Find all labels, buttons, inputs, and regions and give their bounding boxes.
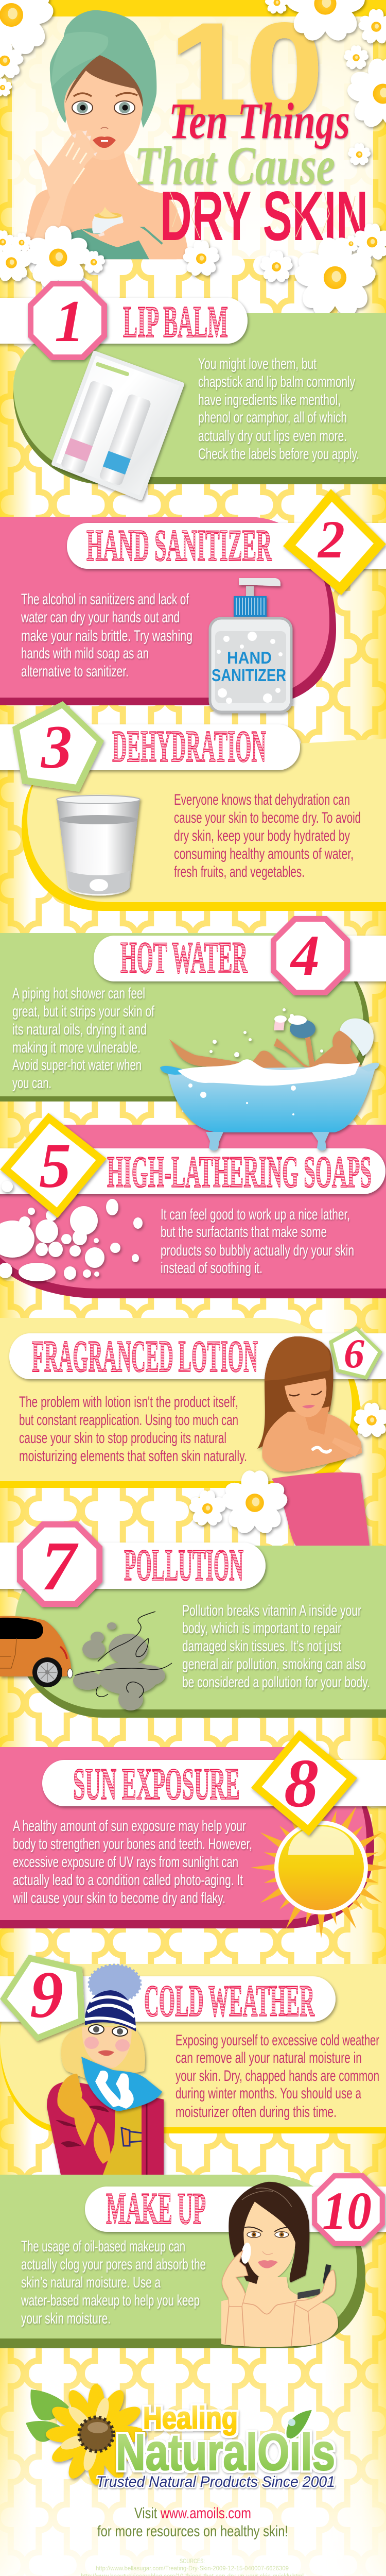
badge: number 6	[329, 1326, 382, 1380]
panel: 9 cold weather	[0, 1955, 386, 2175]
illustration: sanitizer bottle: SANITIZER	[212, 666, 286, 685]
bather	[169, 1028, 363, 1071]
cream streaks	[66, 143, 86, 184]
body text	[182, 1602, 370, 1691]
panel: 3 dehydration	[0, 701, 386, 911]
call to action	[97, 2505, 288, 2540]
body text	[12, 1818, 252, 1907]
header cream panel	[12, 16, 373, 259]
car window	[0, 1618, 43, 1639]
towel dress	[63, 227, 163, 259]
body text: moisturizing elements that soften skin naturally.	[19, 1448, 247, 1465]
body text: you can.	[12, 1075, 51, 1092]
panel background	[0, 517, 336, 705]
top yellow band	[0, 0, 386, 16]
soap sponge	[290, 1020, 315, 1038]
compact	[323, 2264, 331, 2291]
wordmark: Natural Oils: NaturalOils	[116, 2424, 335, 2481]
badge: number 3	[12, 701, 104, 792]
face	[82, 2025, 132, 2068]
body text	[12, 985, 154, 1092]
illustration: sun	[251, 1797, 386, 1938]
illustration: woman with compact	[221, 2182, 338, 2347]
panel background	[0, 933, 370, 1101]
body text: fresh fruits, and vegetables.	[174, 863, 305, 880]
body text: water can dry your hands out and	[21, 609, 180, 626]
body text: cause your skin to stop producing its natural	[19, 1430, 226, 1447]
tagline: Trusted Natural Products Since 2001	[96, 2473, 335, 2490]
panel: 10 make up: MAKE UP	[106, 2184, 206, 2234]
shoulders and neck	[221, 2277, 338, 2347]
body text	[198, 355, 359, 463]
exhaust pipe	[67, 1669, 73, 1678]
illustration: glass of water	[57, 794, 140, 895]
smoke swirls	[75, 1612, 172, 1698]
car body	[0, 1616, 72, 1676]
body text: body to strengthen your bones and teeth. However,	[13, 1836, 252, 1853]
ribbon	[42, 1760, 386, 1806]
shower cap	[340, 1019, 374, 1056]
hair	[65, 55, 143, 107]
body text: make your nails brittle. Try washing	[21, 628, 192, 645]
ribbon	[0, 1976, 336, 2022]
illustration: lip balm card	[54, 353, 182, 498]
body text: The alcohol in sanitizers and lack of	[21, 591, 189, 608]
title: That Cause: That Cause	[134, 135, 335, 196]
panel: 4 hot water	[0, 916, 386, 1150]
face	[285, 1378, 326, 1417]
panel background	[0, 1125, 386, 1298]
badge: number 5: 5	[39, 1130, 71, 1201]
raised hand	[32, 130, 96, 244]
body text	[21, 591, 192, 680]
hair	[229, 2182, 309, 2284]
badge: number 1: 1	[55, 289, 84, 354]
decorative daisies around header	[0, 0, 386, 320]
ribbon	[94, 936, 386, 981]
illustration: girl in winter clothes	[47, 1965, 164, 2175]
body text: its natural oils, drying it and	[12, 1021, 147, 1038]
panel background	[0, 1318, 360, 1488]
bathtub	[167, 1066, 376, 1132]
body text: instead of soothing it.	[161, 1260, 262, 1277]
wheel	[32, 1657, 62, 1687]
shoulder and arm	[262, 1412, 362, 1472]
panel: 6 fragranced lotion	[0, 1318, 386, 1546]
ribbon	[0, 298, 248, 344]
body text: great, but it strips your skin of	[12, 1003, 154, 1020]
body text: The problem with lotion isn't the product itself,	[19, 1394, 238, 1411]
sources	[13, 2558, 371, 2576]
sources: SOURCES:	[180, 2558, 205, 2565]
panel background	[0, 1964, 386, 2133]
panel: 8 sun exposure	[0, 1730, 386, 1938]
body text: A healthy amount of sun exposure may help your	[13, 1818, 246, 1835]
badge: number 8	[251, 1730, 357, 1836]
shoulders and chest	[24, 149, 189, 259]
badge: number 7	[17, 1521, 102, 1607]
panel background	[13, 313, 386, 484]
panel: 7 pollution	[0, 1521, 386, 1718]
lotion squiggle	[313, 1447, 330, 1452]
ribbon	[67, 523, 386, 569]
closed eyes and lips	[289, 1391, 322, 1396]
back hair	[61, 2026, 145, 2081]
nose and lips	[101, 127, 108, 129]
scarf	[81, 2057, 162, 2111]
body text	[161, 1206, 354, 1277]
badge: number 10	[312, 2173, 385, 2246]
sunflower	[26, 2384, 147, 2485]
body text: making it more vulnerable.	[12, 1039, 141, 1056]
body text: hands with mild soap as an	[21, 645, 149, 662]
badge: number 2	[283, 489, 386, 595]
panel: 4 hot water: HOT WATER	[120, 933, 248, 983]
body text: alternative to sanitizer.	[21, 663, 129, 680]
body text: your skin moisture.	[21, 2310, 111, 2327]
face	[64, 64, 143, 160]
collar bone lines	[225, 2301, 311, 2346]
finger nails	[72, 130, 97, 156]
badge: number 5	[0, 1113, 107, 1218]
leaf with droplet	[286, 2409, 313, 2439]
body text: A piping hot shower can feel	[12, 985, 145, 1002]
right hand	[295, 2270, 336, 2312]
illustration: sanitizer bottle: HAND	[227, 648, 272, 667]
body text: You might love them, but	[198, 355, 317, 372]
illustration: soap bubbles	[0, 1181, 143, 1281]
body text: skin’s natural moisture. Use a	[21, 2274, 161, 2291]
sun rays	[251, 1797, 386, 1938]
ribbon	[0, 1543, 266, 1589]
badge: number 9	[0, 1955, 85, 2041]
car door line	[0, 1638, 16, 1668]
jar	[92, 216, 124, 233]
eyes and brows	[244, 2227, 289, 2238]
daisies	[188, 1403, 386, 1537]
body text: but constant reapplication. Using too much can	[19, 1412, 238, 1429]
badge: number 10: 10	[322, 2181, 372, 2241]
panel background	[0, 1747, 374, 1928]
panel background	[0, 2175, 365, 2348]
wordmark: Healing: Healing	[143, 2401, 238, 2435]
braid	[57, 2074, 111, 2164]
visit line: Visit www.amoils.com	[134, 2505, 251, 2522]
panel background	[15, 1546, 386, 1718]
panel background	[22, 738, 386, 911]
panel: 5 high-lathering soaps	[0, 1113, 386, 1298]
illustration: woman applying lotion	[257, 1336, 370, 1546]
ribbon	[85, 2187, 386, 2232]
sun disc	[274, 1821, 368, 1914]
illustration: car exhaust	[0, 1612, 172, 1710]
header section	[0, 0, 386, 320]
panel: 1 lip balm: LIP BALM	[123, 297, 228, 347]
body text	[19, 1394, 247, 1465]
body text: The usage of oil-based makeup can	[21, 2238, 185, 2255]
cotton pad	[240, 2242, 252, 2264]
sources: http://www.bellasugar.com/Treating-Dry-Skin-2009-12-15-040007-6626309	[96, 2566, 289, 2572]
tub feet	[206, 1132, 223, 1150]
foam	[178, 1059, 360, 1086]
badge: number 7: 7	[41, 1528, 79, 1605]
badge: number 2: 2	[317, 510, 345, 569]
badge: number 4	[271, 916, 350, 995]
badge: number 1	[28, 281, 107, 360]
smoke	[73, 1622, 165, 1710]
turban	[50, 10, 156, 128]
body text: Avoid super-hot water when	[12, 1057, 142, 1074]
towel	[272, 1472, 370, 1546]
coat inner	[103, 2094, 142, 2175]
panel: 10 make up	[0, 2173, 386, 2348]
seed head	[79, 2417, 113, 2451]
badge: number 8: 8	[284, 1745, 319, 1821]
body text: actually clog your pores and absorb the	[21, 2256, 206, 2273]
body text: water-based makeup to help you keep	[21, 2292, 200, 2309]
petals	[46, 2384, 147, 2485]
hair back	[257, 1336, 334, 1449]
illustration: woman in bubble bath	[160, 1008, 379, 1150]
left hand	[222, 2250, 248, 2307]
logo: Healing Natural Oils	[26, 2384, 335, 2490]
nose and lips	[262, 2251, 273, 2255]
badge: number 6: 6	[344, 1331, 364, 1377]
body text	[176, 2032, 379, 2121]
badge: number 9: 9	[30, 1958, 63, 2032]
ribbon	[9, 1333, 386, 1379]
leaves	[30, 2389, 69, 2420]
eyes	[72, 93, 137, 114]
illustration: sanitizer bottle	[210, 578, 291, 712]
badge: number 4: 4	[290, 924, 320, 988]
face	[243, 2201, 295, 2279]
body text	[21, 2238, 206, 2327]
title: 10: 10	[170, 0, 323, 142]
ribbon	[0, 1148, 385, 1194]
holding hand	[81, 223, 177, 259]
car tail light	[60, 1647, 67, 1659]
panel: 2 hand sanitizer	[0, 489, 386, 712]
body text	[174, 791, 361, 880]
panel: 1 lip balm	[0, 281, 386, 498]
fringe hair	[265, 1336, 330, 1381]
badge: number 3: 3	[41, 713, 72, 781]
body text: actually lead to a condition called photo-aging. It	[13, 1872, 243, 1889]
rubbing fingers	[332, 1437, 360, 1457]
resources line: for more resources on healthy skin!	[97, 2523, 288, 2540]
body text: will cause your skin to become dry and flaky.	[12, 1890, 225, 1907]
body text: excessive exposure of UV rays from sunlight can	[13, 1854, 238, 1871]
ribbon	[0, 724, 300, 770]
coat	[47, 2081, 164, 2175]
illustration: woman applying cream	[24, 10, 189, 259]
striped hat	[85, 1990, 136, 2031]
raised hand, jar and holding hand	[32, 130, 177, 259]
hat pompom	[89, 1965, 141, 2002]
coat toggle	[121, 2128, 142, 2146]
